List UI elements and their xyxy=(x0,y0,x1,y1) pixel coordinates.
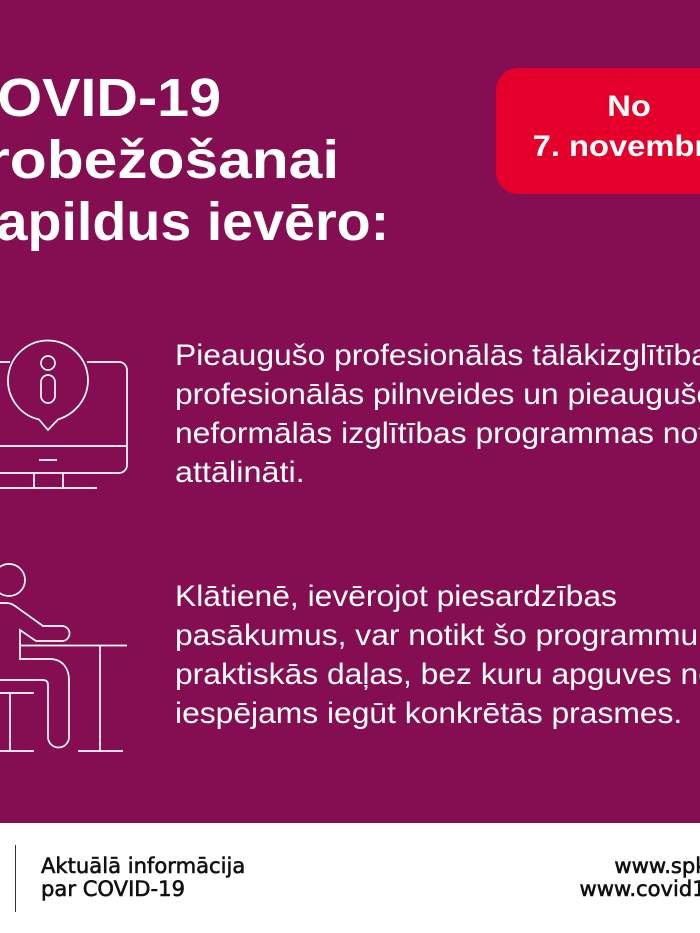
date badge xyxy=(496,68,700,194)
text block: distance learning: profesionālās pilnveides un pieaugušo xyxy=(175,378,700,411)
footer label: par COVID-19 xyxy=(41,876,185,901)
date badge: No xyxy=(607,90,651,123)
text block: in-person practice: iespējams iegūt konkrētās prasmes. xyxy=(175,697,682,730)
text block: in-person practice: pasākumus, var notikt šo programmu xyxy=(175,619,698,652)
text block: in-person practice: Klātienē, ievērojot piesardzības xyxy=(175,580,617,613)
footer divider xyxy=(15,845,16,912)
footer xyxy=(0,823,700,933)
text block: distance learning xyxy=(175,339,700,489)
footer label xyxy=(40,853,245,901)
text block: in-person practice xyxy=(175,580,700,730)
footer label: Aktuālā informācija xyxy=(41,853,245,878)
text block: distance learning: attālināti. xyxy=(175,456,305,489)
title xyxy=(0,68,389,252)
footer links xyxy=(580,853,700,901)
icon: computer with info bubble xyxy=(0,340,128,489)
icon: person at desk xyxy=(0,563,127,752)
